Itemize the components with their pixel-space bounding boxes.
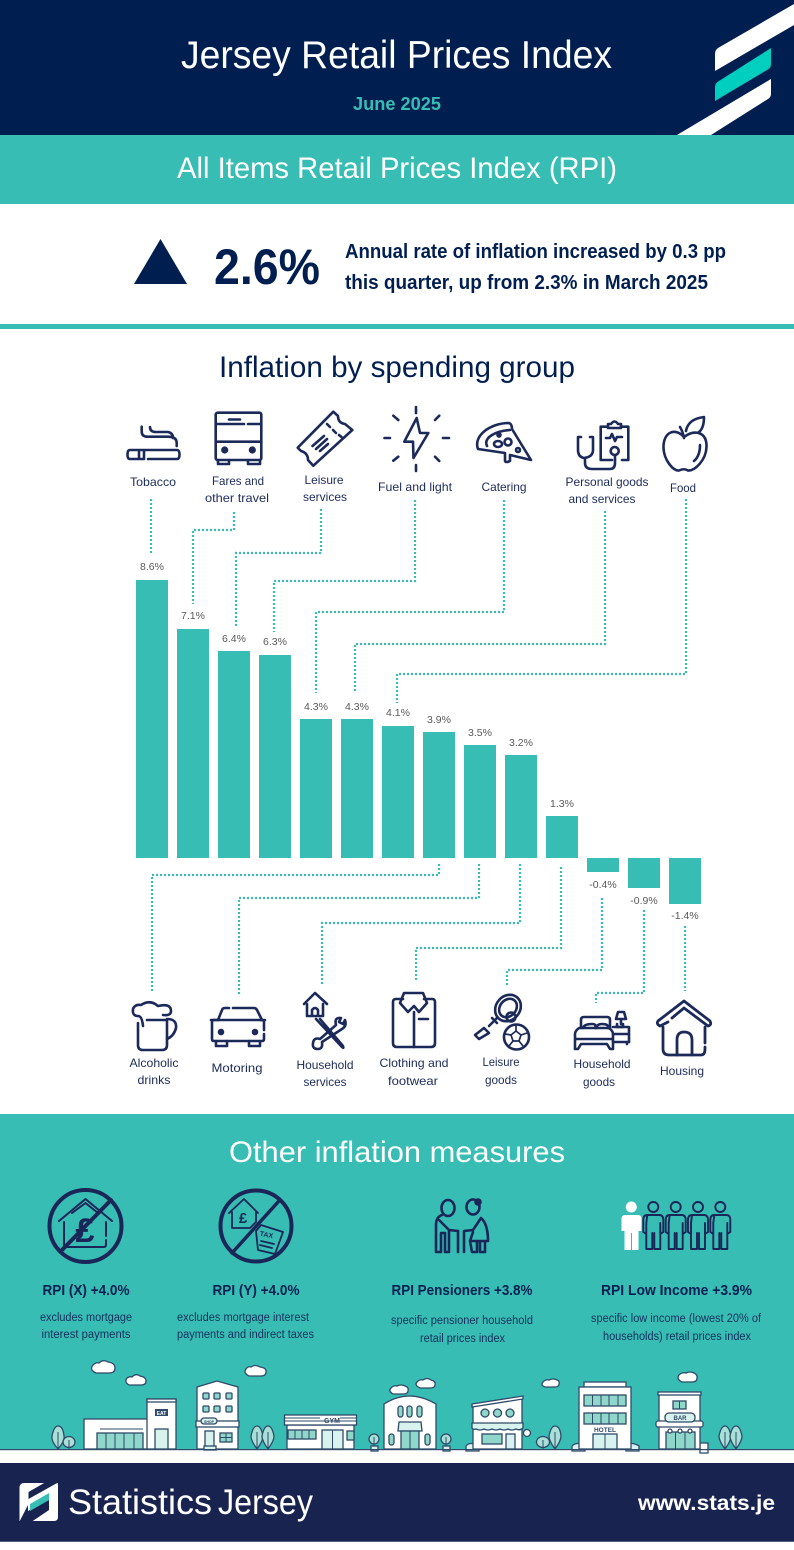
panel: other inflation measures: excludes mortgage [40, 1312, 132, 1324]
building: bar [656, 1392, 703, 1449]
bar chart: 7.1% [181, 610, 205, 622]
band heading: All Items RPI [0, 135, 794, 204]
label: clothing and footwear: Clothing and [380, 1056, 448, 1070]
footer [0, 1463, 794, 1542]
icon: no mortgage: £ [76, 1212, 95, 1250]
icon: no mortgage or tax: £ [239, 1210, 248, 1227]
label: fares and other travel: Fares and [212, 474, 264, 488]
text: RPI pensioners: RPI Pensioners +3.8% [392, 1282, 532, 1299]
headline inflation figure [134, 239, 726, 295]
icon: pizza [477, 423, 531, 462]
label: fares and other travel [205, 474, 269, 505]
label: food: Food [670, 481, 696, 495]
text: RPI low income: RPI Low Income +3.9% [601, 1282, 752, 1299]
label: leisure goods [482, 1055, 520, 1087]
icon: shirt [393, 993, 435, 1047]
statistics jersey logo mark [20, 1482, 58, 1522]
icon: bed and nightstand [575, 1012, 629, 1049]
bar chart: -0.9% [630, 895, 658, 907]
label: fares and other travel: other travel [205, 491, 269, 505]
clouds [92, 1361, 697, 1394]
panel: other inflation measures: payments and indirect taxes [177, 1329, 314, 1341]
headline description: this quarter, up from 2.3% in March 2025 [345, 272, 708, 294]
label: alcoholic drinks: drinks [138, 1073, 170, 1087]
building: eat [84, 1399, 176, 1449]
website: www.stats.je [637, 1492, 775, 1515]
bar chart: 8.6% [140, 561, 164, 573]
bar chart: 3.5% [468, 727, 492, 739]
icon: apple [663, 417, 707, 471]
label: alcoholic drinks [130, 1056, 178, 1087]
building: gym [284, 1415, 356, 1449]
panel: other inflation measures: retail prices index [420, 1333, 505, 1345]
heading: other inflation measures: Other inflation measures [229, 1136, 565, 1169]
icon: no mortgage or tax [220, 1190, 292, 1262]
icon: racket and ball [475, 990, 529, 1050]
logo stripes [677, 4, 794, 135]
panel: other inflation measures [0, 1114, 794, 1449]
icon: no mortgage or tax: TAX [259, 1231, 274, 1240]
bar chart: 4.3% [345, 701, 369, 713]
ground line [0, 1449, 794, 1450]
building: shop: SHOP [204, 1420, 215, 1424]
label: personal goods and services [566, 475, 648, 506]
headline description [345, 241, 726, 294]
building: hotel [579, 1382, 631, 1449]
label: leisure services [303, 473, 347, 504]
label: household services: Household [296, 1058, 354, 1072]
icon: up triangle [134, 239, 187, 284]
panel: other inflation measures: interest payments [42, 1329, 131, 1341]
panel: other inflation measures: specific pensioner household [391, 1315, 533, 1327]
icon: no mortgage [50, 1190, 122, 1262]
building: hotel: HOTEL [594, 1427, 616, 1434]
text: RPI (X): RPI (X) +4.0% [42, 1282, 130, 1299]
title: Jersey Retail Prices Index [181, 34, 612, 77]
label: leisure services: Leisure [304, 473, 344, 487]
icon: low income people [622, 1202, 730, 1250]
icon: beer mug [133, 1002, 176, 1050]
label: leisure goods: goods [485, 1073, 517, 1087]
street scene illustration [0, 1361, 794, 1453]
bar chart: 6.4% [222, 633, 246, 645]
icon: car [211, 1008, 265, 1046]
label: household services: services [304, 1075, 346, 1089]
label: fuel and light: Fuel and light [378, 480, 453, 494]
label: tobacco: Tobacco [130, 475, 176, 489]
heading: inflation by spending group: Inflation by spending group [219, 351, 575, 384]
icon: pensioners [436, 1200, 488, 1252]
label: catering: Catering [482, 480, 526, 494]
bar chart: -0.4% [589, 879, 617, 891]
label: alcoholic drinks: Alcoholic [130, 1056, 178, 1070]
building: arch shop [384, 1396, 436, 1449]
statistics jersey wordmark: Statistics [68, 1483, 212, 1522]
icon: tobacco [128, 427, 180, 459]
panel: other inflation measures: excludes mortgage interest [177, 1312, 310, 1324]
label: household services [296, 1058, 354, 1089]
label: clothing and footwear [380, 1056, 448, 1088]
icon: stethoscope and clipboard [578, 422, 628, 469]
label: household goods: Household [574, 1057, 630, 1071]
bar chart [136, 561, 701, 922]
label: household goods: goods [583, 1075, 615, 1089]
label: motoring: Motoring [212, 1061, 262, 1075]
trees and planters [52, 1426, 742, 1453]
building: bar: BAR [674, 1416, 687, 1422]
label: personal goods and services: Personal goods [566, 475, 648, 489]
headline description: Annual rate of inflation increased by 0.3 pp [345, 241, 726, 263]
statistics jersey wordmark: Jersey [218, 1483, 313, 1522]
label: household goods [574, 1057, 630, 1089]
bar chart: 1.3% [550, 798, 574, 810]
panel: other inflation measures: households) retail prices index [603, 1331, 751, 1343]
text: RPI (Y): RPI (Y) +4.0% [212, 1282, 300, 1299]
building: eat: EAT [157, 1411, 166, 1417]
label: personal goods and services: and services [568, 492, 636, 506]
building: awning shop [472, 1396, 530, 1449]
building: shop [196, 1381, 239, 1450]
bar chart: 6.3% [263, 636, 287, 648]
bar chart: 4.3% [304, 701, 328, 713]
bar chart: -1.4% [671, 910, 699, 922]
icon: lightning [384, 407, 449, 471]
label: clothing and footwear: footwear [388, 1074, 438, 1088]
header banner [0, 0, 794, 135]
statistics jersey wordmark [68, 1483, 313, 1522]
label: leisure goods: Leisure [482, 1055, 520, 1069]
icon: house [657, 1001, 711, 1055]
date subtitle: June 2025 [353, 94, 441, 114]
bar chart: 4.1% [386, 707, 410, 719]
building: gym: GYM [324, 1418, 340, 1425]
label: housing: Housing [660, 1064, 704, 1078]
icon: ticket [298, 412, 352, 466]
panel: other inflation measures: specific low income (lowest 20% of [591, 1313, 762, 1325]
icon: house with tools [304, 993, 346, 1049]
dotted connectors [151, 499, 686, 1003]
headline number: 2.6% [214, 239, 320, 295]
label: leisure services: services [303, 490, 347, 504]
bar chart: 3.2% [509, 737, 533, 749]
band heading: All Items RPI: All Items Retail Prices Index (RPI) [177, 152, 617, 185]
bar chart: 3.9% [427, 714, 451, 726]
icon: bus [216, 413, 261, 464]
